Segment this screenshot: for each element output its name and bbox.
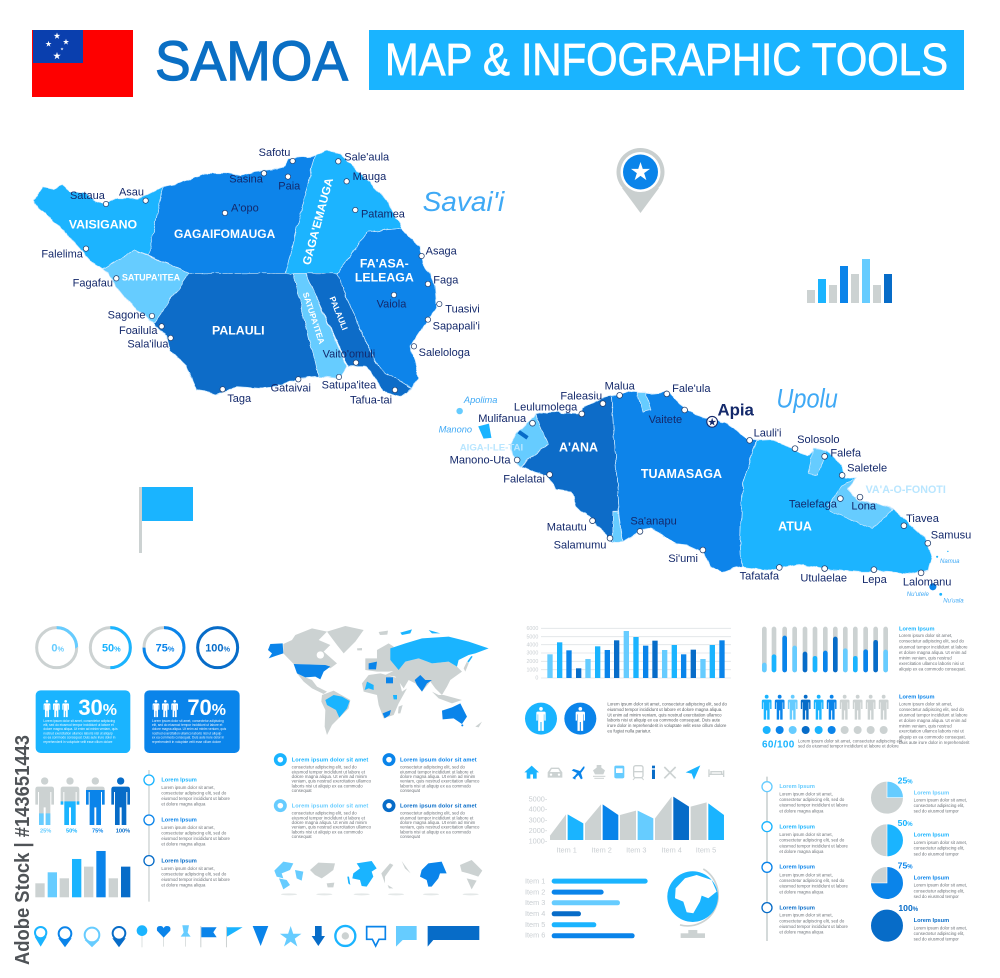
list items	[276, 755, 480, 839]
island names: Manono	[439, 424, 472, 434]
timeline: consectetur adipiscing elit, sed do	[779, 797, 845, 802]
list items: laboris nisi ut aliquip ex ea commodo	[400, 829, 472, 834]
text block: exercitation ullamco laboris nisi ut	[899, 661, 964, 666]
region names: PALAULI	[327, 295, 350, 332]
list items: consequat	[400, 788, 421, 793]
text block: exercitation ullamco laboris nisi ut	[899, 729, 964, 734]
region: Aiga-i-le-Tai	[510, 415, 548, 466]
stat card 30%: 30%	[78, 695, 117, 720]
stat card 30%: elit, sed do eiusmod tempor incididunt ut labore et	[43, 723, 114, 727]
region: Gaga'emauga patch south	[613, 512, 623, 542]
region names: SATUPA'ITEA	[301, 291, 327, 345]
area arrow chart: Item 5	[696, 845, 716, 854]
pie labels and text: sed do eiusmod tempor	[914, 937, 959, 942]
timeline: consectetur adipiscing elit, sed do	[161, 831, 227, 836]
timeline: et dolore magna aliqua	[161, 883, 206, 888]
timeline: et dolore magna aliqua	[779, 930, 824, 935]
60 of 100 people pictogram: sed do eiusmod tempor incididunt ut labore et dolore	[798, 743, 899, 748]
title banner: MAP & INFOGRAPHIC TOOLS	[385, 34, 948, 85]
stat card 70%: reprehenderit in voluptate velit esse cillum dolore	[152, 740, 221, 744]
island names: Apolima	[463, 395, 497, 405]
text block: minim veniam, quis nostrud	[899, 723, 952, 728]
bar chart	[35, 851, 130, 897]
text block: aliquip ex ea commodo consequat.	[899, 734, 966, 739]
list items: eiusmod tempor incididunt ut labore et	[292, 769, 366, 774]
place names: Samusu	[931, 530, 971, 542]
area arrow chart: Item 4	[661, 845, 682, 854]
pie labels and text: consectetur adipiscing elit,	[914, 888, 964, 893]
stat card 30%	[36, 690, 130, 753]
region names: SATUPA'ITEA	[122, 273, 181, 283]
region names: GAGAIFOMAUGA	[174, 227, 276, 241]
place names: Mauga	[353, 171, 387, 183]
pie labels and text: Lorem ipsum dolor sit amet,	[914, 840, 967, 845]
person circle icons	[525, 703, 596, 735]
pie charts	[871, 781, 903, 942]
timeline: Lorem ipsum dolor sit amet,	[779, 913, 833, 918]
text block	[899, 626, 968, 671]
place names: Vaiola	[377, 299, 407, 311]
stat card 70%: nostrud exercitation ullamco laboris nisi ut aliquip	[152, 731, 221, 735]
map icons row	[280, 926, 479, 947]
pie labels and text: consectetur adipiscing elit,	[914, 846, 964, 851]
text block: eiusmod tempor incididunt ut labore	[899, 712, 968, 717]
small bar chart	[807, 259, 892, 303]
list items: eiusmod tempor incididunt ut labore et	[400, 815, 474, 820]
region names: VAISIGANO	[69, 218, 138, 232]
stat card 70%: dolore magna aliqua. Ut enim ad minim veniam, quis	[152, 727, 227, 731]
island name: Savai'i: Savai'i	[423, 186, 505, 217]
stock id vertical text: Adobe Stock | #143651443	[12, 735, 34, 965]
stat card 30%: ex ea commodo consequat. Duis aute irure dolor in	[43, 736, 116, 740]
paragraph: eiusmod tempor incididunt ut labore et dolore magna aliqua.	[607, 707, 722, 712]
place names	[450, 380, 971, 588]
area arrow chart: Item 1	[556, 845, 577, 854]
donut labels: 100%	[205, 642, 231, 654]
pie labels and text: sed do eiusmod tempor	[914, 809, 959, 814]
island names: Nu'uala	[943, 598, 964, 604]
place names: Patamea	[361, 208, 406, 220]
stat card 70%: 70%	[187, 695, 226, 720]
place names: Salelologa	[419, 347, 471, 359]
list items: consectetur adipiscing elit, sed do	[400, 764, 466, 769]
column chart: 2000	[526, 659, 538, 665]
place names: Sasina	[229, 173, 264, 185]
timeline: Lorem ipsum dolor sit amet,	[779, 791, 833, 796]
place names: A'opo	[231, 202, 259, 214]
pie labels and text: sed do eiusmod tempor	[914, 894, 959, 899]
horizontal bars	[525, 876, 648, 940]
horizontal bars: Item 4	[525, 909, 545, 918]
island names: Nu'utele	[907, 592, 929, 598]
pie labels and text: 25%	[898, 775, 913, 785]
column chart: 0	[535, 676, 538, 682]
timeline: et dolore magna aliqua	[161, 842, 206, 847]
timeline: Lorem Ipsum	[161, 859, 197, 865]
timeline: consectetur adipiscing elit, sed do	[161, 791, 227, 796]
region: Satupa'itea west	[103, 250, 189, 323]
timeline	[762, 777, 848, 941]
pie labels and text: consectetur adipiscing elit,	[914, 931, 964, 936]
text block: minim veniam, quis nostrud	[899, 655, 952, 660]
stat card 30%: dolore magna aliqua. Ut enim ad minim veniam, quis	[43, 727, 118, 731]
place names	[41, 147, 480, 406]
timeline: et dolore magna aliqua	[161, 802, 206, 807]
list items: dolore magna aliqua. Ut enim ad minim	[400, 820, 476, 825]
map pin with star	[616, 148, 664, 213]
region names: FA'ASA-	[360, 257, 409, 271]
capital marker: Apia	[707, 416, 717, 427]
donut labels: 75%	[156, 642, 175, 654]
globes row	[274, 860, 482, 895]
60 of 100 people pictogram	[762, 695, 903, 751]
timeline: Lorem Ipsum	[779, 865, 815, 871]
region names: A'ANA	[559, 440, 598, 454]
list items: veniam, quis nostrud exercitation ullamco	[400, 825, 480, 830]
place names: Saletele	[847, 462, 887, 474]
place names: Matautu	[547, 522, 587, 534]
map: Savai'i	[33, 147, 505, 406]
text block: et dolore magna aliqua. Ut enim ad	[899, 718, 967, 723]
place names: Mulifanua	[478, 413, 527, 425]
islands	[456, 408, 949, 596]
place names: Sale'aula	[344, 152, 390, 164]
island names	[439, 382, 964, 604]
place names: Fale'ula	[672, 383, 711, 395]
pie labels and text: consectetur adipiscing elit,	[914, 803, 964, 808]
flag of Samoa	[32, 30, 133, 97]
place names: Si'umi	[668, 553, 698, 565]
map: Upolu	[439, 380, 971, 604]
pie labels and text: 50%	[898, 818, 913, 828]
timeline: et dolore magna aliqua	[779, 849, 824, 854]
pie labels and text: Lorem Ipsum	[914, 918, 949, 924]
text block: Duis aute irure dolor in reprehenderit	[899, 740, 970, 745]
pie labels and text: Lorem Ipsum	[914, 790, 949, 796]
place names: Asaga	[426, 245, 458, 257]
place names: Tuasivi	[445, 303, 480, 315]
place names: Sala'ilua	[127, 339, 169, 351]
paragraph: irure dolor in reprehenderit in voluptate velit esse cillum dolore	[607, 723, 727, 728]
text block: consectetur adipiscing elit, sed do	[899, 707, 965, 712]
list items: veniam, quis nostrud exercitation ullamco	[292, 825, 372, 830]
region names: PALAULI	[212, 324, 265, 338]
paragraph: laboris nisi ut aliquip ex ea commodo consequat. Duis aute	[607, 718, 721, 723]
region: Gaga'emauga	[286, 151, 403, 273]
donut labels: 0%	[51, 642, 64, 654]
stat card 30%: nostrud exercitation ullamco laboris nisi ut aliquip	[43, 731, 113, 735]
text block: eiusmod tempor incididunt ut labore	[899, 644, 968, 649]
place names: Manono-Uta	[450, 455, 511, 467]
place names: Faleasiu	[560, 390, 602, 402]
pie labels and text: 100%	[898, 903, 919, 913]
list items: dolore magna aliqua. Ut enim ad minim	[400, 774, 476, 779]
place names: Vaito'omuli	[323, 349, 375, 361]
pie labels and text: sed do eiusmod tempor	[914, 851, 959, 856]
timeline: Lorem Ipsum	[161, 818, 197, 824]
list items: consectetur adipiscing elit, sed do	[292, 810, 357, 815]
horizontal bars: Item 2	[525, 887, 545, 896]
timeline: et dolore magna aliqua	[779, 808, 824, 813]
place names: Sataua	[70, 190, 106, 202]
stat card 70%: Lorem ipsum dolor sit amet, consectetur adipiscing	[152, 719, 224, 723]
stat card 30%: Lorem ipsum dolor sit amet, consectetur adipiscing	[43, 719, 115, 723]
region names: GAGA'EMAUGA	[300, 176, 336, 266]
list items: dolore magna aliqua. Ut enim ad minim	[292, 774, 367, 779]
place names: Foailula	[119, 325, 158, 337]
list items: eiusmod tempor incididunt ut labore et	[400, 769, 474, 774]
timeline: eiusmod tempor incididunt ut labore	[779, 843, 848, 848]
pie labels and text: 75%	[898, 861, 913, 871]
island names: Namua	[940, 559, 960, 565]
list items: veniam, quis nostrud exercitation ullamco	[292, 779, 372, 784]
list items: veniam, quis nostrud exercitation ullamco	[400, 779, 480, 784]
timeline: Lorem ipsum dolor sit amet,	[161, 785, 215, 790]
region names: TUAMASAGA	[641, 467, 722, 481]
world map	[268, 626, 489, 735]
place names: Paia	[278, 180, 301, 192]
list items: consectetur adipiscing elit, sed do	[400, 810, 466, 815]
text block	[899, 695, 970, 745]
stat card 70%: ex ea commodo consequat. Duis aute irure dolor in	[152, 736, 224, 740]
list items: Lorem ipsum dolor sit amet	[400, 804, 477, 810]
timeline: Lorem Ipsum	[161, 777, 197, 783]
stat card 70%	[144, 690, 240, 753]
area arrow chart: Item 2	[591, 845, 612, 854]
area arrow chart: 5000-	[529, 795, 548, 804]
timeline	[144, 770, 230, 902]
place names: Safotu	[259, 147, 290, 159]
place names: Lona	[851, 500, 877, 512]
region: Palauli east	[306, 273, 412, 397]
region: Va'a-o-Fonoti	[828, 478, 892, 529]
region names: VA'A-O-FONOTI	[866, 484, 946, 496]
place names: Taelefaga	[789, 498, 838, 510]
region: A'ana	[520, 396, 623, 542]
timeline: Lorem Ipsum	[779, 784, 815, 790]
capital name: Apia	[717, 401, 755, 420]
timeline: consectetur adipiscing elit, sed do	[161, 872, 227, 877]
list items: Lorem ipsum dolor sit amet	[400, 758, 477, 764]
region names: ATUA	[778, 520, 812, 534]
region names	[69, 176, 414, 345]
place markers	[83, 158, 442, 393]
area arrow chart: 1000-	[529, 837, 548, 846]
list items: consequat	[400, 834, 421, 839]
timeline: Lorem ipsum dolor sit amet,	[779, 872, 833, 877]
person fill pictograms: 100%	[116, 828, 130, 834]
timeline: eiusmod tempor incididunt ut labore	[161, 877, 230, 882]
text block: Lorem Ipsum	[899, 695, 935, 701]
island names: Upolu	[776, 382, 838, 413]
timeline: eiusmod tempor incididunt ut labore	[779, 924, 848, 929]
place names: Tiavea	[906, 513, 940, 525]
horizontal bars: Item 1	[525, 876, 545, 885]
place names: Lauli'i	[754, 427, 782, 439]
pie labels and text: Lorem ipsum dolor sit amet,	[914, 883, 967, 888]
place names: Asau	[119, 187, 144, 199]
middle infographic column	[276, 755, 480, 947]
column chart: 5000	[526, 634, 538, 640]
column chart: 4000	[526, 642, 538, 648]
region: Atua	[740, 440, 932, 574]
place markers	[514, 391, 931, 576]
timeline: Lorem ipsum dolor sit amet,	[161, 866, 215, 871]
list items: dolore magna aliqua. Ut enim ad minim	[292, 820, 367, 825]
list items: laboris nisi ut aliquip ex ea commodo	[400, 783, 472, 788]
person fill pictograms: 25%	[40, 828, 51, 834]
timeline: consectetur adipiscing elit, sed do	[779, 878, 845, 883]
list items: consequat	[292, 834, 312, 839]
timeline: eiusmod tempor incididunt ut labore	[161, 836, 230, 841]
place names: Tafatafa	[740, 570, 780, 582]
area arrow chart: Item 3	[626, 845, 647, 854]
area arrow chart: 2000-	[529, 826, 548, 835]
paragraph: eu fugiat nulla pariatur.	[607, 728, 651, 733]
person fill pictograms: 75%	[92, 828, 103, 834]
region names	[460, 440, 946, 534]
desk globe	[667, 869, 718, 938]
place names: Satupa'itea	[322, 379, 377, 391]
list items: laboris nisi ut aliquip ex ea commodo	[292, 829, 363, 834]
text block: Lorem ipsum dolor sit amet,	[899, 633, 952, 638]
timeline: Lorem Ipsum	[779, 825, 815, 831]
column chart: 3000	[526, 651, 538, 657]
stat card 70%: elit, sed do eiusmod tempor incididunt ut labore et	[152, 723, 222, 727]
area arrow chart	[529, 795, 724, 854]
place names: Sa'anapu	[630, 515, 677, 527]
region: Tuamasaga	[611, 391, 757, 572]
timeline: consectetur adipiscing elit, sed do	[779, 838, 845, 843]
pill bar chart	[762, 627, 888, 672]
blue flag on pole	[139, 487, 193, 553]
region names: AIGA-I-LE-TAI	[460, 443, 523, 454]
place names: Sagone	[108, 310, 146, 322]
place names: Falelima	[41, 248, 84, 260]
stat card 30%: reprehenderit in voluptate velit esse cillum dolore	[43, 740, 113, 744]
list items: eiusmod tempor incididunt ut labore et	[292, 815, 366, 820]
place names: Lepa	[862, 574, 888, 586]
pie labels and text: Lorem Ipsum	[914, 875, 949, 881]
area arrow chart: 4000-	[529, 805, 548, 814]
text block: consectetur adipiscing elit, sed do	[899, 639, 965, 644]
timeline: et dolore magna aliqua	[779, 889, 824, 894]
place names: Gataivai	[271, 382, 311, 394]
pie labels and text	[898, 775, 967, 942]
60 of 100 people pictogram: Lorem ipsum dolor sit amet, consectetur adipiscing elit,	[798, 739, 903, 744]
place names: Utulaelae	[800, 572, 847, 584]
text block: et dolore magna aliqua. Ut enim ad	[899, 650, 967, 655]
60 of 100 people pictogram: 60/100	[762, 740, 795, 751]
region names: LELEAGA	[355, 271, 414, 285]
timeline: Lorem ipsum dolor sit amet,	[779, 832, 833, 837]
transport and travel icons	[524, 765, 724, 780]
place names: Malua	[605, 380, 636, 392]
place names: Salamumu	[554, 540, 606, 552]
right infographic column	[762, 626, 970, 942]
region: Vaisigano	[33, 185, 163, 269]
list items: consequat	[292, 788, 312, 793]
list items: Lorem ipsum dolor sit amet	[292, 758, 368, 764]
person fill pictograms	[35, 777, 130, 834]
region: Falefa patch	[808, 449, 826, 475]
pin icons row	[35, 925, 268, 947]
list items: Lorem ipsum dolor sit amet	[292, 804, 368, 810]
left infographic column	[35, 628, 268, 947]
place names: Solosolo	[797, 434, 840, 446]
horizontal bars: Item 6	[525, 931, 545, 940]
pie labels and text: Lorem ipsum dolor sit amet,	[914, 797, 967, 802]
place names: Lalomanu	[903, 576, 951, 588]
column chart	[526, 626, 731, 682]
paragraph: Lorem ipsum dolor sit amet, consectetur adipiscing elit, sed do	[607, 702, 727, 707]
area arrow chart: 3000-	[529, 815, 548, 824]
horizontal bars: Item 5	[525, 920, 545, 929]
progress donuts	[37, 628, 238, 668]
pie labels and text: Lorem ipsum dolor sit amet,	[914, 925, 967, 930]
text block: Lorem Ipsum	[899, 626, 935, 632]
timeline: eiusmod tempor incididunt ut labore	[161, 796, 230, 801]
timeline: eiusmod tempor incididunt ut labore	[779, 884, 848, 889]
coastal inlets	[664, 404, 707, 544]
text block: Lorem ipsum dolor sit amet,	[899, 701, 952, 706]
timeline: Lorem Ipsum	[779, 906, 815, 912]
person fill pictograms: 50%	[66, 828, 77, 834]
centre-right infographic column	[524, 626, 731, 940]
place names: Tafua-tai	[350, 394, 392, 406]
list items: laboris nisi ut aliquip ex ea commodo	[292, 783, 363, 788]
donut labels: 50%	[102, 642, 121, 654]
column chart: 1000	[526, 667, 538, 673]
text block: aliquip ex ea commodo consequat.	[899, 666, 966, 671]
paragraph: Ut enim ad minim veniam, quis nostrud exercitation ullamco	[607, 712, 722, 717]
region: Gagaifomauga	[148, 156, 315, 273]
column chart: 6000	[526, 626, 538, 632]
place names: Taga	[227, 393, 252, 405]
place names: Falefa	[830, 447, 862, 459]
place names: Faga	[433, 275, 459, 287]
donut labels	[51, 642, 231, 654]
place names: Fagafau	[73, 278, 113, 290]
timeline: Lorem ipsum dolor sit amet,	[161, 825, 215, 830]
list items: consectetur adipiscing elit, sed do	[292, 764, 357, 769]
timeline: eiusmod tempor incididunt ut labore	[779, 803, 848, 808]
region: Palauli	[154, 273, 318, 395]
pie labels and text: Lorem Ipsum	[914, 833, 949, 839]
place names: Falelatai	[503, 473, 545, 485]
region: Gaga'emauga patch north	[637, 392, 651, 412]
place names: Sapapali'i	[433, 320, 480, 332]
place names: Vaitete	[649, 414, 682, 426]
timeline: consectetur adipiscing elit, sed do	[779, 918, 845, 923]
title: SAMOA: SAMOA	[155, 29, 349, 92]
region: Fa'asaleleaga	[337, 228, 437, 388]
place names: Leulumolega	[514, 401, 578, 413]
horizontal bars: Item 3	[525, 898, 545, 907]
region: Satupa'itea east	[293, 273, 347, 378]
